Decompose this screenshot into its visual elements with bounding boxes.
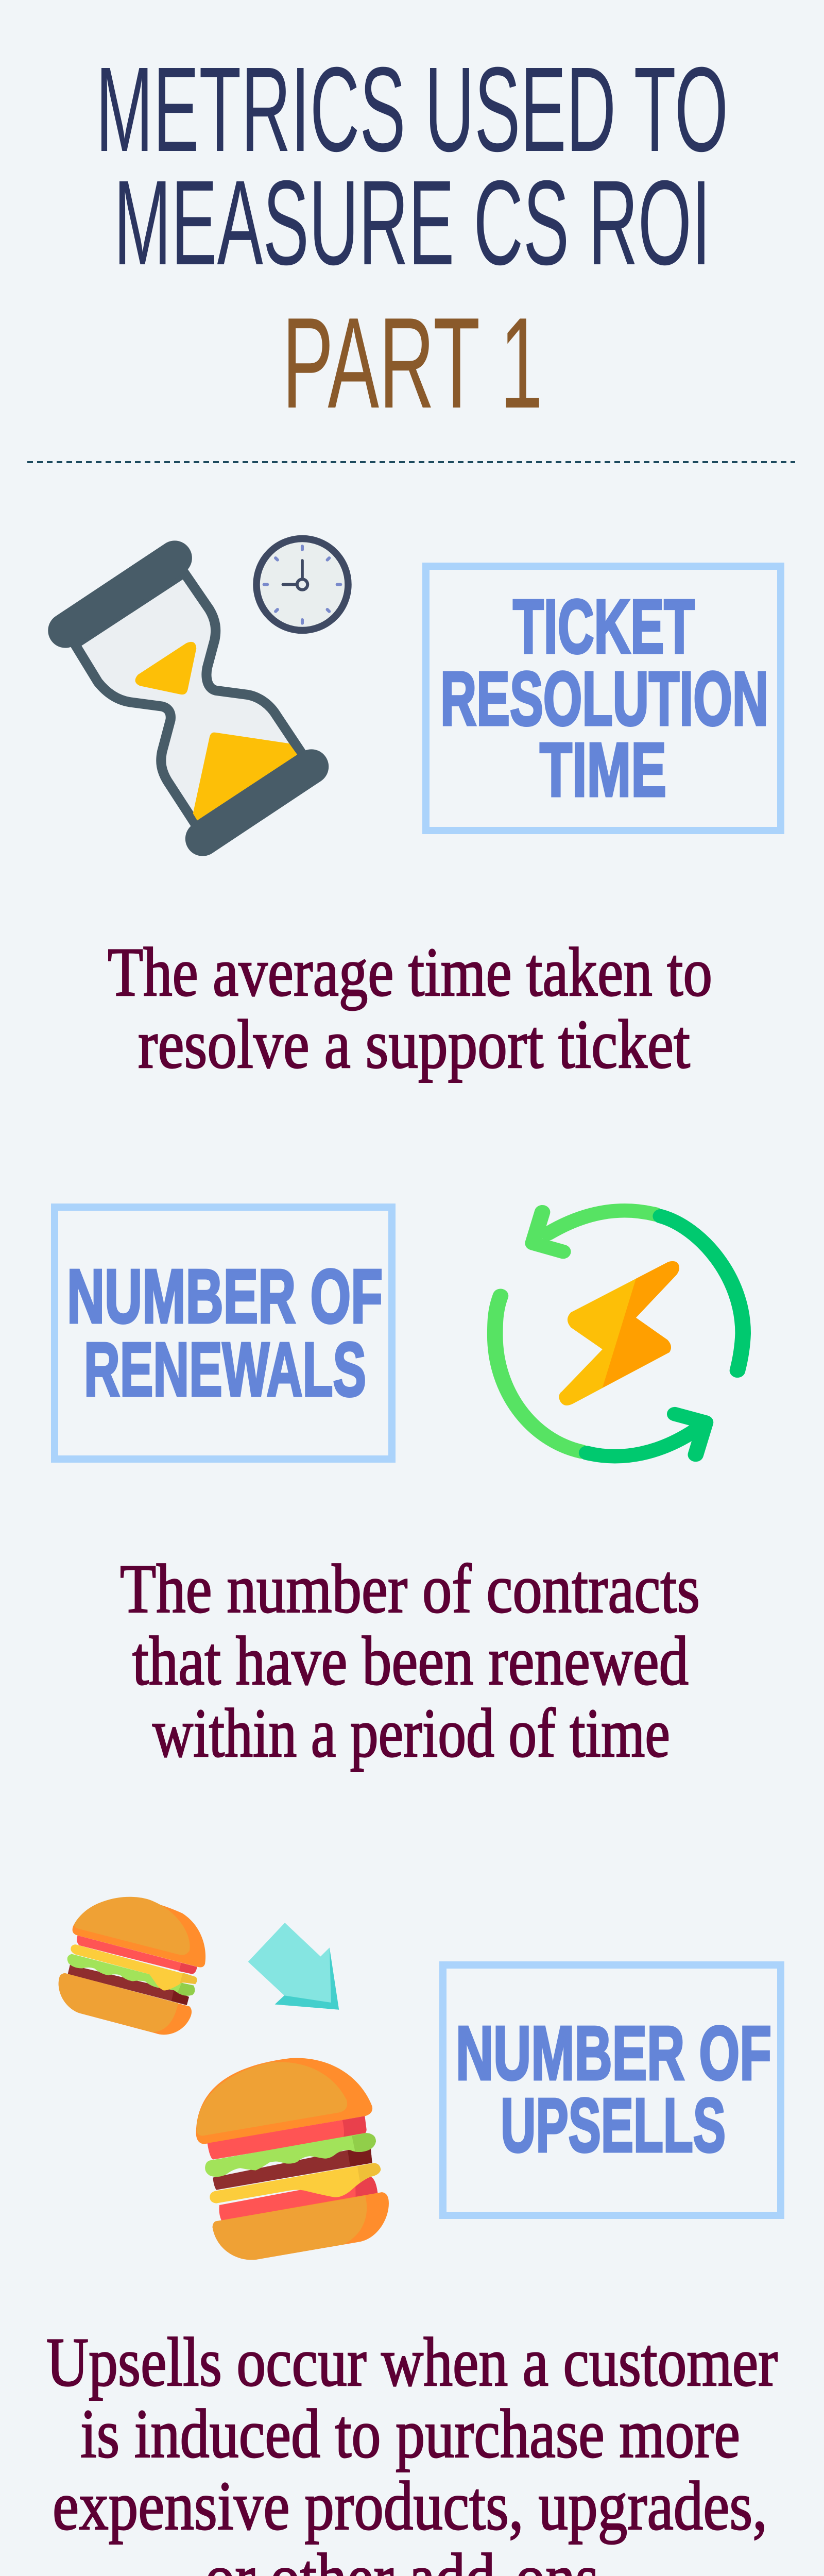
panel: number of renewals — [55, 1207, 743, 1772]
icon: large burger — [196, 2058, 389, 2260]
description: that have been renewed — [132, 1623, 689, 1700]
description — [46, 2324, 778, 2576]
icon: renewal arrows with lightning bolt — [495, 1211, 743, 1456]
panel: ticket resolution time — [65, 539, 781, 1083]
icon: small burger — [33, 1866, 237, 2069]
description: The average time taken to — [108, 934, 712, 1011]
description: within a period of time — [152, 1695, 670, 1772]
title: PART 1 — [282, 291, 543, 435]
metric box: TICKET — [513, 584, 695, 669]
metric box — [443, 1965, 781, 2215]
metric box: TIME — [540, 727, 666, 812]
description — [120, 1551, 700, 1772]
description: resolve a support ticket — [138, 1006, 690, 1083]
metric box — [426, 566, 781, 831]
description: The number of contracts — [120, 1551, 700, 1628]
panel: number of upsells — [33, 1866, 781, 2576]
icon: clock — [256, 539, 348, 630]
description — [108, 934, 712, 1083]
metric box: RENEWALS — [84, 1327, 366, 1412]
metric box — [55, 1207, 392, 1459]
metric box: NUMBER OF — [67, 1254, 383, 1339]
icon: hourglass — [65, 558, 312, 839]
icon: teal arrow — [248, 1923, 339, 2010]
title — [96, 42, 728, 435]
